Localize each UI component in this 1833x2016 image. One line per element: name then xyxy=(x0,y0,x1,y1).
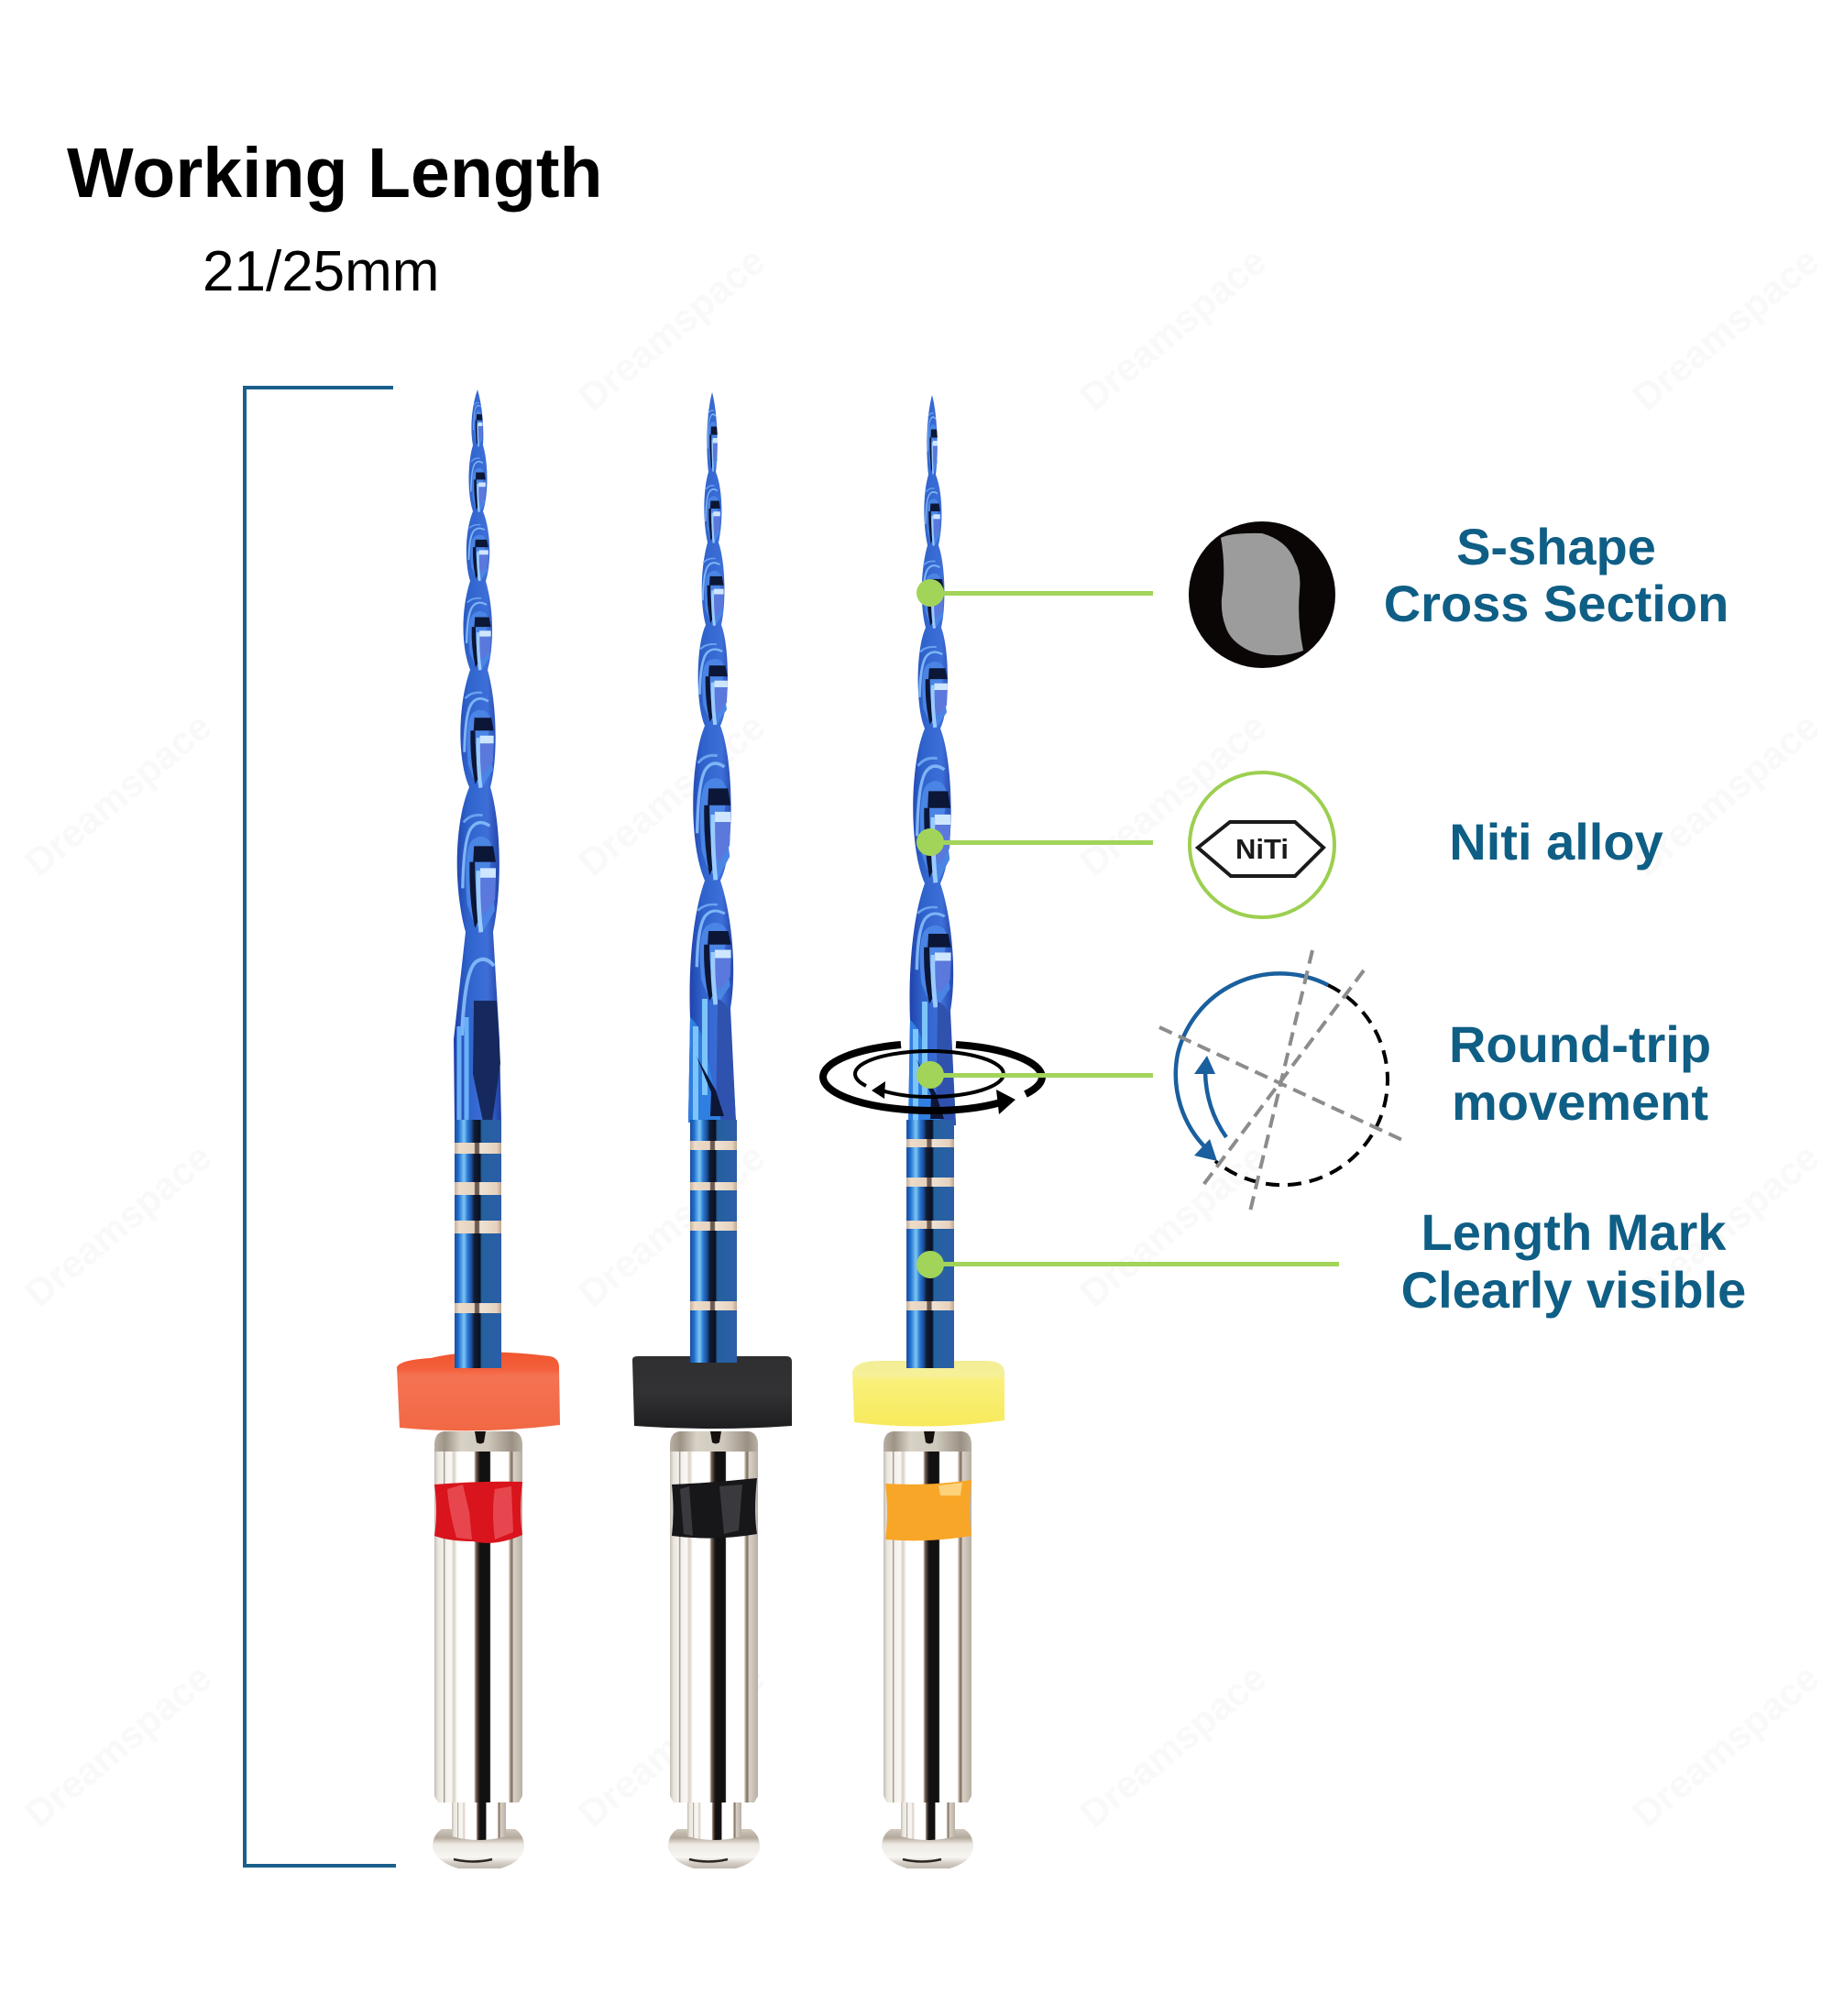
callout line: S-shape xyxy=(916,579,1153,607)
watermarks: Dreamspace xyxy=(570,705,773,884)
callout line: round-trip xyxy=(916,1061,1153,1089)
label: Round-trip movement: Round-trip xyxy=(1449,1015,1711,1073)
watermarks: Dreamspace xyxy=(16,1135,219,1315)
callout line: NiTi xyxy=(916,828,1153,856)
watermarks: Dreamspace xyxy=(1624,239,1827,419)
watermarks: Dreamspace xyxy=(570,1135,773,1315)
label: Length Mark Clearly visible: Length Mark xyxy=(1421,1203,1727,1261)
icon: S-shape cross section xyxy=(1189,521,1335,668)
watermarks: Dreamspace xyxy=(1624,1656,1827,1835)
bracket: working length span xyxy=(245,388,396,1866)
watermarks: Dreamspace xyxy=(570,239,773,419)
icon: reciprocating angle diagram xyxy=(1159,950,1402,1211)
file 3: yellow xyxy=(852,395,1004,1868)
label: S-shape cross section: Cross Section xyxy=(1384,575,1729,632)
icon: NiTi alloy badge: NiTi xyxy=(1235,833,1289,865)
watermarks: Dreamspace xyxy=(16,705,219,884)
file 2: black xyxy=(632,392,792,1868)
watermarks: Dreamspace xyxy=(1071,239,1274,419)
icon: NiTi alloy badge xyxy=(1190,772,1334,917)
callout line: length mark xyxy=(916,1251,1339,1278)
icon: rotation rings around file xyxy=(823,1045,1042,1114)
watermarks: Dreamspace xyxy=(1071,1135,1274,1315)
label: Round-trip movement: movement xyxy=(1452,1073,1708,1131)
watermarks: Dreamspace xyxy=(570,1656,773,1835)
label: Niti alloy: Niti alloy xyxy=(1449,813,1663,871)
label: S-shape cross section: S-shape xyxy=(1456,518,1656,575)
watermarks xyxy=(16,239,1827,1835)
watermarks: Dreamspace xyxy=(1624,705,1827,884)
subtitle: length values: 21/25mm xyxy=(203,240,439,303)
watermarks: Dreamspace xyxy=(16,1656,219,1835)
title: Working Length xyxy=(67,134,603,213)
watermarks: Dreamspace xyxy=(1071,1656,1274,1835)
watermarks: Dreamspace xyxy=(1624,1135,1827,1315)
file 1: red xyxy=(397,389,560,1868)
watermarks: Dreamspace xyxy=(1071,705,1274,884)
label: Length Mark Clearly visible: Clearly visible xyxy=(1401,1261,1746,1319)
